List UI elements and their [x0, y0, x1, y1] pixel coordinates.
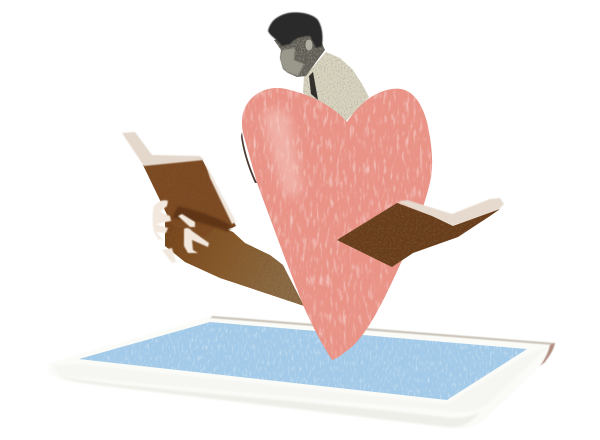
ear: [306, 40, 312, 50]
book pages: [122, 132, 204, 166]
book shading: [172, 206, 232, 232]
book pages: [397, 198, 504, 226]
tablet body: [49, 316, 555, 428]
heart highlights: [262, 109, 302, 197]
left hand holding book: [122, 132, 304, 306]
heart: [241, 88, 432, 360]
book cover: [337, 203, 500, 267]
hair: [268, 12, 323, 48]
book cover: [143, 159, 236, 240]
shirt: [303, 52, 369, 122]
arm: [165, 215, 304, 306]
tablet: [49, 316, 555, 428]
neck and face: [274, 30, 325, 77]
right open book: [337, 198, 504, 267]
fingers: [152, 200, 171, 240]
tablet screen: [79, 322, 527, 400]
man reading: [268, 12, 369, 122]
tie: [309, 72, 318, 100]
heart left edge shadow: [241, 132, 257, 183]
